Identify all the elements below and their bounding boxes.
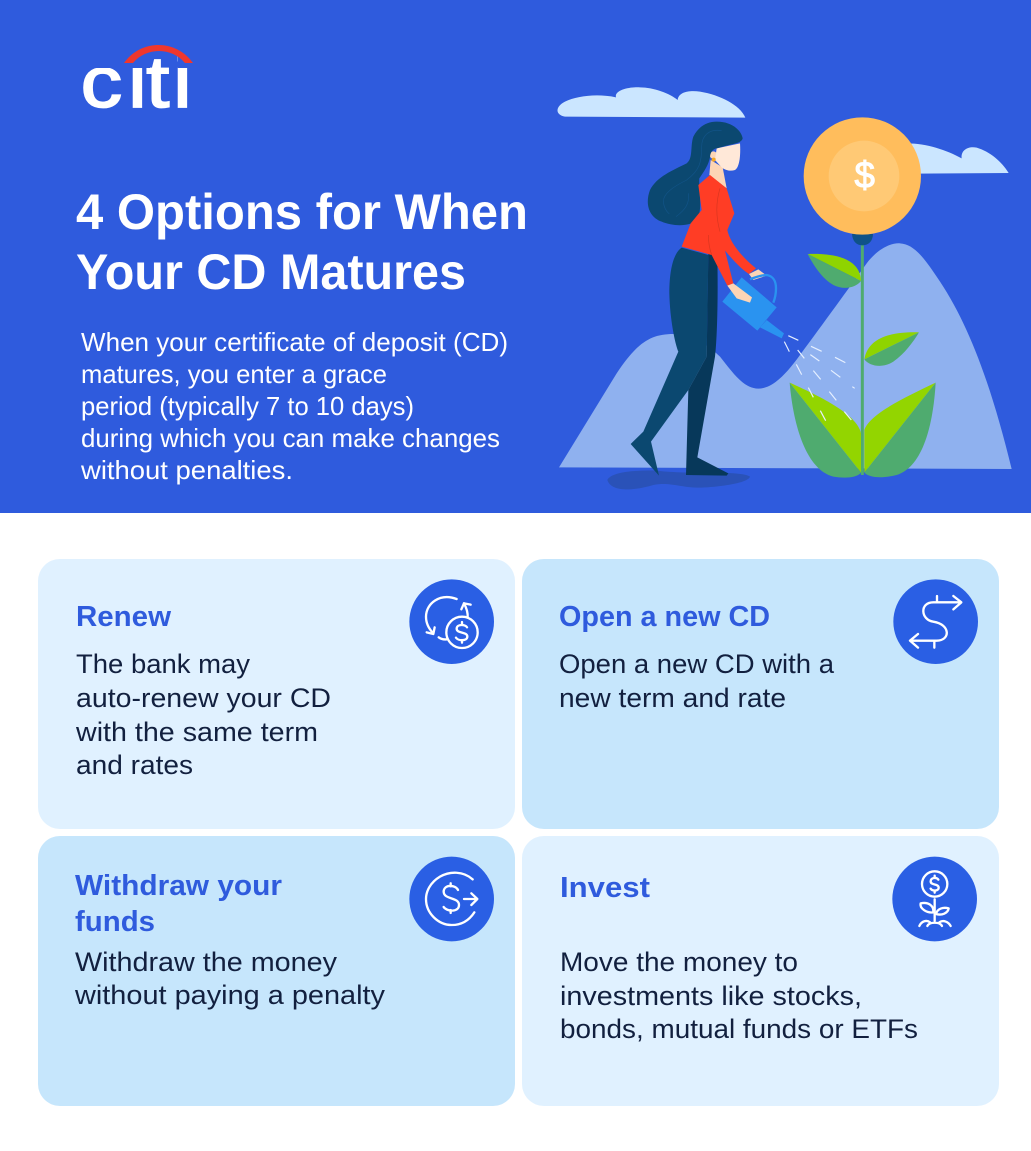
coin: $ [854,155,875,196]
body: renew: and rates [76,750,193,780]
body: withdraw your funds [74,947,386,1010]
body: renew: auto-renew your CD [76,683,331,713]
intro paragraph: When your certificate of deposit (CD) [81,327,508,357]
body: open a new CD [559,649,835,713]
flower base [852,234,873,245]
heading: withdraw your funds [75,870,282,938]
cloud right [907,143,1009,174]
panel: renew [38,559,515,829]
panel: withdraw your funds [38,836,515,1106]
cloud left [557,87,745,118]
body: open a new CD: Open a new CD with a [559,649,835,679]
intro paragraph: period (typically 7 to 10 days) [81,391,414,421]
heading: withdraw your funds: funds [75,906,155,938]
body: invest: bonds, mutual funds or ETFs [560,1014,918,1044]
title: Your CD Matures [76,244,466,300]
intro paragraph: during which you can make changes [81,423,500,453]
heading: open a new CD: Open a new CD [559,601,770,633]
coin [804,117,921,235]
body: renew: with the same term [75,717,318,747]
panel: blue header [0,0,1031,513]
icon: renew [409,579,494,664]
water drops [784,336,855,421]
body: renew: The bank may [76,649,250,679]
icon: open a new CD [893,579,978,664]
mountains [559,243,1012,469]
intro paragraph: matures, you enter a grace [81,359,387,389]
icon: invest [892,857,977,941]
heading: withdraw your funds: Withdraw your [75,870,282,902]
body: withdraw your funds: without paying a penalty [74,980,386,1010]
intro paragraph: without penalties. [80,455,293,485]
body: open a new CD: new term and rate [559,683,786,713]
body: invest [560,947,918,1044]
panel: open a new CD [522,559,999,829]
watering can [722,275,784,338]
body: invest: Move the money to [560,947,798,977]
icon: withdraw [409,857,494,941]
ground shadow [607,471,750,489]
body: renew [75,649,331,780]
body: invest: investments like stocks, [560,981,862,1011]
heading: renew: Renew [76,601,171,633]
plant stem [858,243,867,475]
logo: citi: citi [81,43,192,123]
intro paragraph [80,327,508,485]
title: 4 Options for When [76,184,528,240]
heading: invest: Invest [560,872,650,904]
illustration: woman watering a money plant [557,87,1012,489]
body: withdraw your funds: Withdraw the money [75,947,338,977]
woman [631,122,767,476]
title [76,184,528,300]
leaves [790,254,936,478]
panel: invest [522,836,999,1106]
